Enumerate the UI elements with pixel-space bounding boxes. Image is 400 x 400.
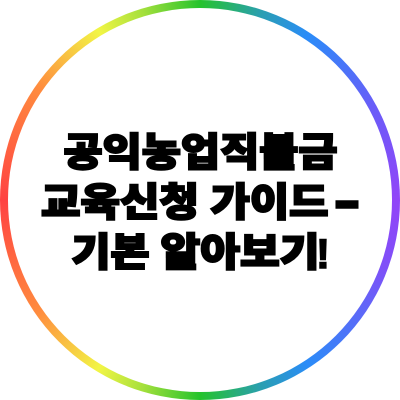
title: –: [336, 180, 358, 224]
title: 가이드: [210, 182, 328, 225]
title: 교육신청: [41, 182, 199, 225]
title: 알아보기: [160, 232, 320, 275]
title: 공익농업직불금: [64, 132, 338, 175]
title: 기본: [72, 232, 150, 275]
title: !: [316, 230, 330, 277]
